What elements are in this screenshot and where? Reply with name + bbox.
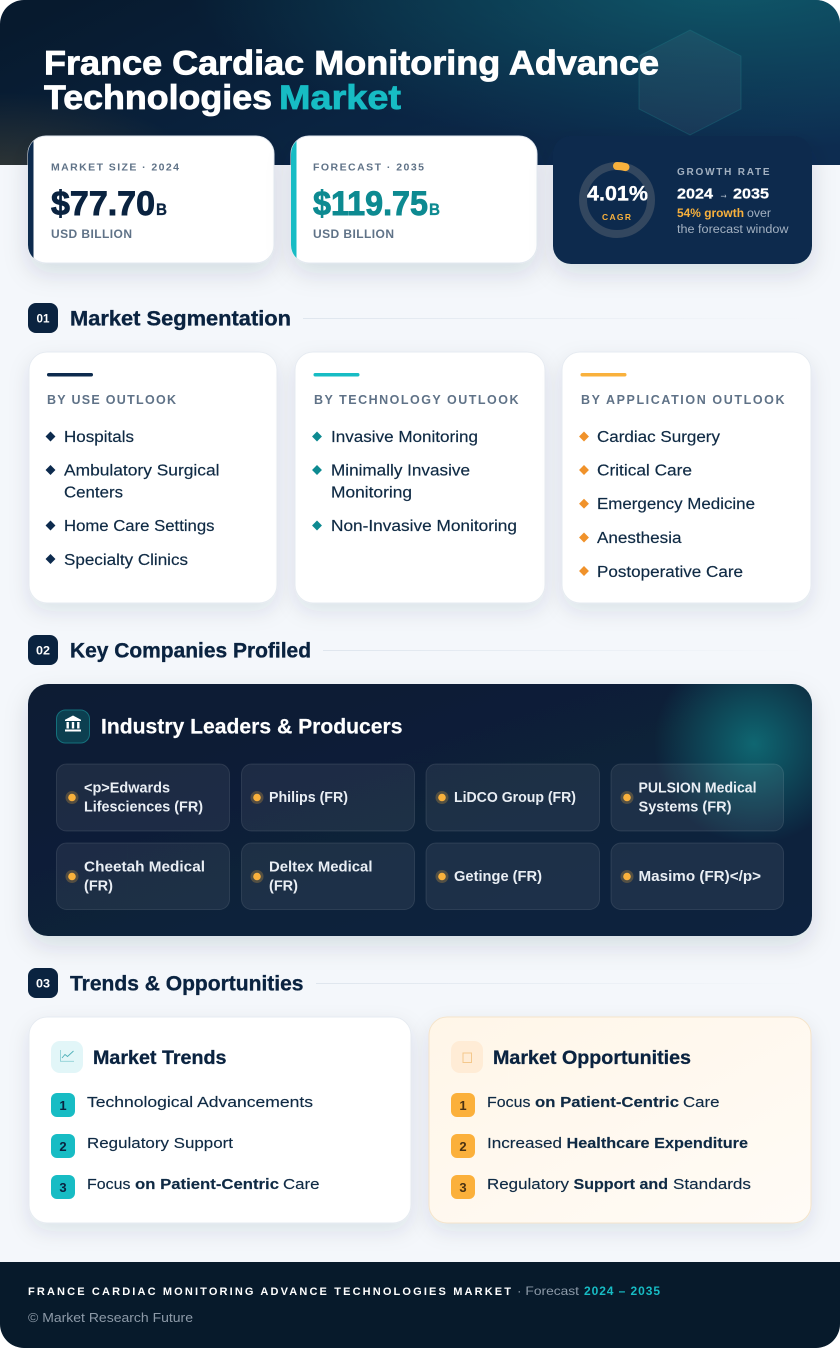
section heading: market segmentation: Market Segmentation [70, 308, 291, 330]
company names: PULSION Medical [638, 780, 756, 796]
section heading: trends and opportunities: Trends & Opportunities [70, 972, 304, 996]
growth rate text: 54% growth [677, 208, 744, 220]
company names [84, 780, 761, 894]
company chips [56, 764, 784, 910]
panel: by technology outlook: Non-Invasive Monitoring [331, 518, 517, 535]
numbered trends list: 3 [59, 1180, 67, 1195]
panel: by use outlook: Home Care Settings [64, 518, 215, 535]
growth rate text: GROWTH RATE [677, 167, 770, 178]
section heading: market segmentation: 01 [36, 312, 50, 326]
stat card: forecast 2035: $119.75 [313, 185, 428, 223]
numbered trends list: Focus [87, 1176, 130, 1193]
numbered opportunities list: Regulatory [487, 1176, 570, 1193]
growth rate text: the forecast window [677, 224, 789, 236]
section heading: trends and opportunities [28, 968, 812, 998]
section heading: key companies: Key Companies Profiled [70, 640, 311, 662]
footer: FRANCE CARDIAC MONITORING ADVANCE TECHNOLOGIES MARKET [28, 1286, 511, 1298]
stat card: forecast 2035: B [429, 200, 440, 219]
chip status dots [66, 791, 634, 883]
numbered opportunities list [451, 1093, 751, 1199]
title: France Cardiac Monitoring Advance [44, 44, 659, 82]
numbered trends list: 1 [59, 1098, 67, 1113]
numbered opportunities list: Focus [487, 1094, 530, 1111]
numbered opportunities list: 1 [459, 1098, 467, 1113]
title: Market [279, 79, 401, 117]
panel: by technology outlook [295, 352, 545, 603]
numbered trends list: Regulatory Support [87, 1135, 234, 1152]
numbered opportunities list: Care [683, 1094, 720, 1111]
numbered opportunities list: Healthcare Expenditure [566, 1135, 748, 1152]
company names: <p>Edwards [84, 780, 170, 796]
panel: by technology outlook: Invasive Monitoring [331, 429, 478, 446]
panel: by application outlook: Critical Care [597, 462, 692, 480]
section heading: key companies: 02 [36, 644, 50, 658]
numbered opportunities list: on Patient-Centric [535, 1094, 679, 1111]
panel: market opportunities: Market Opportunities [493, 1048, 691, 1069]
footer: 2024 – 2035 [584, 1284, 660, 1298]
numbered trends list: 2 [59, 1139, 67, 1154]
footer: · Forecast [517, 1284, 580, 1298]
numbered trends list: Care [283, 1176, 320, 1193]
growth rate text [677, 167, 789, 236]
company names: (FR) [269, 878, 298, 894]
company names: Masimo (FR)</p> [638, 869, 761, 885]
panel: by application outlook: BY APPLICATION OUTLOOK [581, 393, 784, 407]
numbered trends list [51, 1093, 320, 1199]
growth rate card [553, 136, 812, 264]
icon: decorative hexagon [639, 30, 741, 135]
panel: market opportunities [429, 1017, 811, 1223]
CAGR ring chart: CAGR [602, 212, 631, 222]
numbered opportunities list: Standards [673, 1176, 751, 1193]
company names: Getinge (FR) [454, 869, 542, 885]
company names: Deltex Medical [269, 860, 372, 876]
icon: missing glyph box [451, 1041, 483, 1073]
header banner [0, 0, 840, 165]
section heading: market segmentation [28, 303, 812, 333]
panel: by use outlook: Specialty Clinics [64, 552, 188, 569]
stat card: market size 2024: B [156, 200, 167, 219]
icon: line chart [51, 1041, 83, 1073]
stat card: market size 2024 [28, 136, 274, 263]
stat card: forecast 2035: USD BILLION [313, 227, 394, 241]
panel: by technology outlook: Minimally Invasive [331, 462, 470, 480]
growth rate text: → [719, 186, 728, 202]
numbered trends list: on Patient-Centric [135, 1176, 279, 1193]
numbered opportunities list: Support and [574, 1176, 668, 1193]
stat card: market size 2024: $77.70 [51, 185, 155, 223]
footer: © Market Research Future [28, 1311, 193, 1325]
panel: by application outlook [562, 352, 811, 603]
panel: market trends [29, 1017, 411, 1223]
growth rate text: 2035 [733, 186, 769, 202]
panel: by use outlook: Hospitals [64, 429, 134, 446]
panel: by use outlook: Centers [64, 484, 123, 502]
stat card: forecast 2035 [291, 136, 537, 263]
stat card: market size 2024: USD BILLION [51, 227, 132, 241]
panel: by use outlook [29, 352, 277, 603]
numbered opportunities list: 3 [459, 1180, 467, 1195]
company names: LiDCO Group (FR) [454, 790, 576, 806]
panel: industry leaders [28, 684, 812, 936]
panel: industry leaders: Industry Leaders & Producers [101, 716, 402, 738]
panel: by application outlook: Anesthesia [597, 530, 682, 547]
panel: by technology outlook: Monitoring [331, 484, 412, 502]
company names: (FR) [84, 878, 113, 894]
company names: Philips (FR) [269, 790, 348, 806]
stat card: forecast 2035: FORECAST · 2035 [313, 162, 424, 174]
section heading: trends and opportunities: 03 [36, 976, 50, 990]
CAGR ring chart: 4.01% [587, 182, 648, 206]
panel: by technology outlook: BY TECHNOLOGY OUTLOOK [314, 393, 518, 407]
growth rate text: 2024 [677, 186, 713, 202]
company names: Lifesciences (FR) [84, 800, 203, 816]
footer [0, 1262, 840, 1348]
title [44, 44, 659, 117]
numbered opportunities list: Increased [487, 1135, 562, 1152]
CAGR ring chart [583, 166, 651, 234]
panel: by use outlook: Ambulatory Surgical [64, 462, 220, 480]
company names: Cheetah Medical [84, 860, 205, 876]
panel: market trends: Market Trends [93, 1048, 226, 1069]
numbered opportunities list: 2 [459, 1139, 467, 1154]
growth rate text: over [747, 208, 771, 220]
company names: Systems (FR) [638, 800, 732, 816]
stat card: market size 2024: MARKET SIZE · 2024 [51, 162, 179, 174]
icon: institution [56, 710, 90, 743]
title: Technologies [44, 79, 272, 117]
panel: by use outlook: BY USE OUTLOOK [47, 393, 176, 407]
panel: by application outlook: Cardiac Surgery [597, 429, 720, 446]
panel: by application outlook: Emergency Medicine [597, 496, 755, 513]
panel: by application outlook: Postoperative Care [597, 564, 743, 581]
numbered trends list: Technological Advancements [87, 1094, 313, 1111]
section heading: key companies [28, 635, 812, 665]
